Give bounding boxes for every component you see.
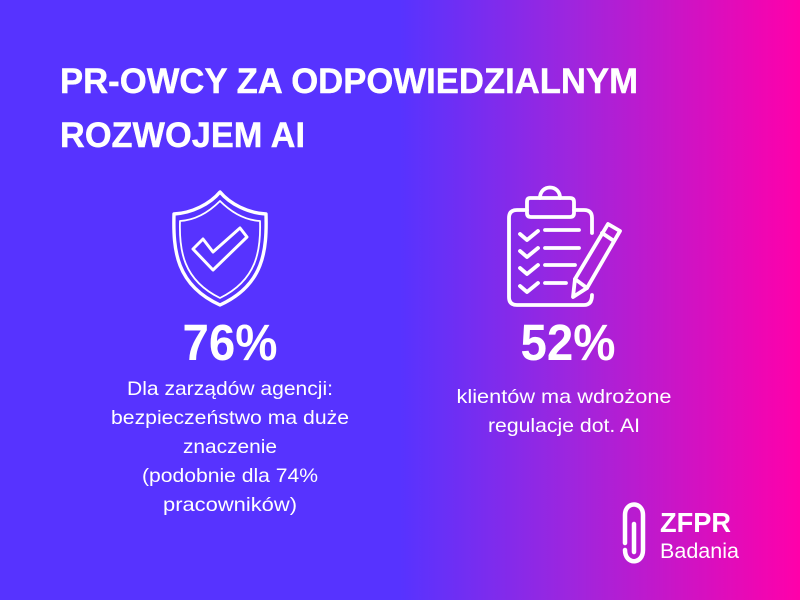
- title: ROZWOJEM AI: [60, 116, 305, 155]
- text block: left description: bezpieczeństwo ma duże: [111, 407, 349, 429]
- logo text: Badania: Badania: [660, 540, 739, 563]
- title: PR-OWCY ZA ODPOWIEDZIALNYM: [60, 62, 638, 101]
- logo: ZFPR Badania: [625, 504, 739, 563]
- logo text: ZFPR: ZFPR: [660, 507, 731, 538]
- text block: right description: regulacje dot. AI: [488, 415, 640, 437]
- text block: right description: klientów ma wdrożone: [456, 386, 672, 408]
- text block: left description: (podobnie dla 74%: [142, 465, 318, 487]
- title: [60, 62, 638, 155]
- stat: 76%: 76%: [182, 314, 278, 371]
- text block: left description: Dla zarządów agencji:: [127, 378, 333, 400]
- text block: left description: [111, 378, 349, 516]
- icon: clipboard with checklist and pencil: [509, 188, 620, 305]
- text block: left description: pracowników): [163, 494, 297, 516]
- stat: 52%: 52%: [520, 314, 616, 371]
- icon: shield with check mark: [174, 192, 266, 305]
- text block: right description: [456, 386, 672, 437]
- icon: paperclip: [625, 504, 643, 561]
- text block: left description: znaczenie: [183, 436, 277, 458]
